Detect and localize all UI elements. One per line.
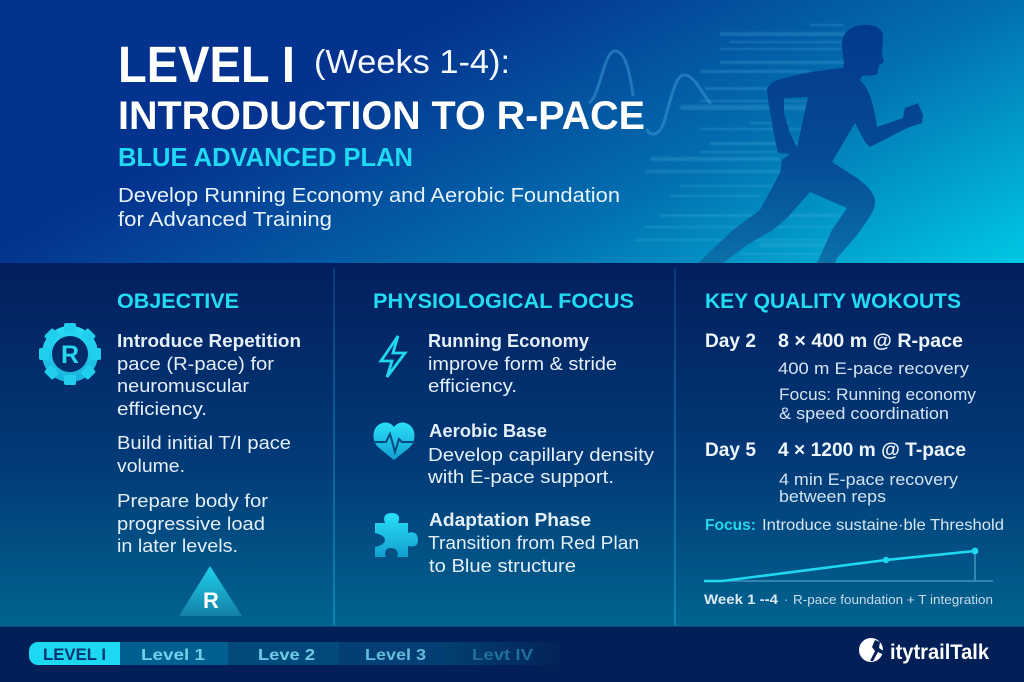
- workout: day 5: between reps: [779, 487, 886, 506]
- wave line: [590, 51, 710, 134]
- text: objective items: pace (R-pace) for: [117, 354, 274, 374]
- segment: active level I: LEVEL I: [43, 645, 106, 664]
- panel: header banner: [0, 0, 1024, 263]
- panel: key quality workouts: [704, 290, 1004, 607]
- item: aerobic base: Develop capillary density: [428, 445, 654, 465]
- icon: lightning bolt: [381, 336, 405, 377]
- panel: objective: [39, 290, 301, 616]
- text: objective items: progressive load: [117, 514, 265, 534]
- title line: Level I: LEVEL I: [118, 36, 295, 93]
- item: aerobic base: [427, 421, 654, 487]
- focus line: Focus:: [705, 517, 756, 534]
- item: running economy: [428, 331, 617, 396]
- workout: day 5: 4 min E-pace recovery: [779, 470, 959, 489]
- workout: day 5: 4 × 1200 m @ T-pace: [778, 440, 966, 461]
- item: running economy: Running Economy: [428, 331, 589, 351]
- workout: day 2: & speed coordination: [779, 404, 949, 423]
- workout: day 2: 8 × 400 m @ R-pace: [778, 331, 963, 352]
- tagline: [118, 185, 620, 231]
- workout: day 5: Day 5: [705, 440, 756, 461]
- panel: content background: [0, 263, 1024, 625]
- title line: introduction: INTRODUCTION TO R-PACE: [118, 94, 645, 138]
- item: adaptation phase: Transition from Red Plan: [428, 533, 639, 553]
- item: aerobic base: Aerobic Base: [429, 421, 547, 441]
- panel: physiological focus: [373, 290, 654, 576]
- logo wordmark: itytrailTalk: [890, 641, 989, 664]
- icon: R triangle: R: [203, 588, 219, 613]
- title line: weeks: (Weeks 1-4):: [314, 43, 510, 80]
- text: objective items: neuromuscular: [117, 376, 249, 396]
- icon: gear with R: [39, 323, 101, 385]
- icon: heart with pulse: [373, 423, 415, 460]
- text: objective items: [117, 331, 301, 556]
- icon: R triangle: [179, 566, 242, 616]
- icon: gear with R: R: [61, 341, 79, 369]
- item: running economy: improve form & stride: [428, 354, 617, 374]
- segment: level IV: Levt IV: [472, 647, 533, 664]
- footer band: [0, 625, 1024, 682]
- segment: level 1: [120, 642, 228, 665]
- text: objective items: in later levels.: [117, 536, 238, 556]
- segment: level 1: Level 1: [141, 647, 205, 664]
- text: objective items: volume.: [117, 456, 185, 476]
- workout: day 5: [705, 440, 966, 506]
- segment: level 3: [339, 642, 444, 665]
- line chart: progression: [704, 548, 993, 581]
- title: [118, 36, 645, 138]
- subtitle: BLUE ADVANCED PLAN: [118, 142, 413, 172]
- workout: day 2: [705, 331, 976, 423]
- segment: level 3: Level 3: [365, 647, 426, 664]
- tagline: Develop Running Economy and Aerobic Foundation: [118, 185, 620, 207]
- text: objective items: efficiency.: [117, 399, 207, 419]
- segment: level IV: [444, 642, 560, 665]
- chart caption: [704, 591, 993, 607]
- segment: level 2: [228, 642, 339, 665]
- chart caption: R-pace foundation + T integration: [793, 592, 993, 607]
- chart caption: Week 1 --4: [704, 591, 778, 607]
- heading: key quality workouts: KEY QUALITY WOKOUTS: [705, 290, 961, 313]
- workout: day 2: Focus: Running economy: [779, 385, 976, 404]
- level progress bar: [29, 642, 560, 665]
- heading: objective: OBJECTIVE: [117, 290, 239, 313]
- item: adaptation phase: [428, 510, 639, 576]
- speed lines: [635, 24, 845, 255]
- segment: active level I: [29, 642, 120, 665]
- icon: logo runner mark: [859, 638, 885, 662]
- icon: puzzle piece: [375, 513, 418, 557]
- item: aerobic base: with E-pace support.: [427, 467, 614, 487]
- focus line: Introduce sustaine·ble Threshold: [762, 517, 1004, 534]
- item: adaptation phase: Adaptation Phase: [429, 510, 591, 530]
- runner silhouette: [698, 25, 923, 263]
- item: adaptation phase: to Blue structure: [429, 556, 576, 576]
- text: objective items: Prepare body for: [117, 491, 268, 511]
- tagline: for Advanced Training: [118, 209, 332, 231]
- item: running economy: efficiency.: [428, 376, 517, 396]
- chart caption: ·: [784, 592, 788, 607]
- text: objective items: Introduce Repetition: [117, 331, 301, 351]
- workout: day 2: 400 m E-pace recovery: [778, 359, 970, 378]
- workout: day 2: Day 2: [705, 331, 756, 352]
- logo: citytrailTalk: [859, 638, 989, 664]
- text: objective items: Build initial T/I pace: [117, 433, 291, 453]
- heading: physiological focus: PHYSIOLOGICAL FOCUS: [373, 290, 634, 313]
- segment: level 2: Leve 2: [258, 647, 315, 664]
